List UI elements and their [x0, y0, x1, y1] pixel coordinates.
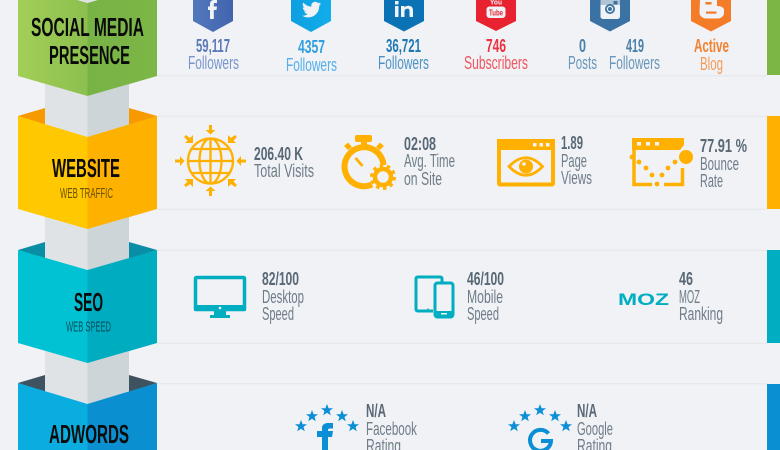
- icon: facebook rating stars: [295, 404, 359, 450]
- stat: youtube subscribers: 746: [486, 36, 506, 56]
- stat: total visits: [254, 144, 314, 181]
- stat: instagram followers: [609, 36, 660, 73]
- stat: total visits: Total Visits: [254, 161, 314, 181]
- stat: average time on site: [404, 134, 455, 189]
- stat: instagram posts: [568, 36, 597, 73]
- icon: blogger shield: [691, 0, 731, 32]
- icon: twitter shield: [291, 0, 331, 32]
- heading: seo: SEO: [74, 287, 103, 317]
- stat: bounce rate: 77.91 %: [700, 136, 747, 156]
- stat: page views: Views: [561, 168, 592, 188]
- central pillar: [45, 0, 129, 450]
- icon: youtube shield: [476, 0, 516, 31]
- stat: desktop speed: Desktop: [262, 287, 304, 307]
- stat: page views: Page: [561, 151, 587, 171]
- right accent bars: [767, 0, 780, 450]
- panel: seo block: [18, 242, 157, 363]
- icon: moz logo: MOZ: [618, 290, 669, 309]
- icon: linkedin shield: [384, 0, 424, 32]
- heading: social media presence: SOCIAL MEDIA: [31, 12, 144, 42]
- icon: bounce rate window: [630, 138, 693, 186]
- icon: page views window with eye: [497, 139, 555, 184]
- stat: moz ranking: 46: [679, 269, 693, 289]
- stat: instagram posts: Posts: [568, 53, 597, 73]
- stat: twitter followers: Followers: [286, 55, 337, 75]
- stat: moz ranking: MOZ: [679, 287, 700, 307]
- stat: moz ranking: Ranking: [679, 304, 723, 324]
- stat: facebook rating: [366, 401, 418, 450]
- stat: facebook followers: 59,117: [196, 36, 230, 56]
- stat: facebook followers: [188, 36, 239, 73]
- panel: adwords block: [18, 375, 157, 450]
- stat: instagram followers: 419: [626, 36, 644, 56]
- stat: active blog: Blog: [700, 54, 723, 74]
- stat: bounce rate: Rate: [700, 171, 723, 191]
- stat: facebook rating: Facebook: [366, 419, 418, 439]
- icon: globe with arrows: [175, 125, 246, 196]
- stat: twitter followers: 4357: [298, 37, 325, 57]
- stat: average time on site: on Site: [404, 169, 442, 189]
- stat: facebook followers: Followers: [188, 53, 239, 73]
- stat: mobile speed: 46/100: [467, 269, 504, 289]
- panel: social media presence block: [18, 0, 157, 96]
- stat: desktop speed: 82/100: [262, 269, 299, 289]
- heading: social media presence: PRESENCE: [49, 40, 130, 70]
- stat: moz ranking: [679, 269, 723, 324]
- icon: google rating stars: [508, 404, 572, 450]
- stat: instagram posts: 0: [579, 36, 586, 56]
- stat: desktop speed: [262, 269, 304, 324]
- stat: page views: [561, 133, 592, 188]
- heading: social media presence: [31, 12, 144, 70]
- stat: bounce rate: Bounce: [700, 154, 739, 174]
- stat: desktop speed: Speed: [262, 304, 294, 324]
- icon: stopwatch with gear: [344, 135, 394, 188]
- stat: twitter followers: [286, 37, 337, 75]
- stat: youtube subscribers: Subscribers: [464, 53, 528, 73]
- icon: tablet and phone: [416, 277, 453, 317]
- stat: google rating: N/A: [577, 401, 597, 421]
- stat: average time on site: 02:08: [404, 134, 436, 154]
- stat: mobile speed: Mobile: [467, 287, 503, 307]
- heading: website: WEBSITE: [52, 153, 120, 183]
- stat: mobile speed: Speed: [467, 304, 499, 324]
- icon: youtube shield: Tube: [489, 8, 503, 18]
- panel: website block: [18, 108, 157, 229]
- stat: average time on site: Avg. Time: [404, 151, 455, 171]
- stat: mobile speed: [467, 269, 504, 324]
- panel outlines: [157, 75, 767, 384]
- stat: instagram followers: Followers: [609, 53, 660, 73]
- icon: desktop monitor: [194, 278, 246, 318]
- subheading: web speed: WEB SPEED: [66, 318, 111, 336]
- stat: linkedin followers: Followers: [378, 53, 429, 73]
- icon: facebook shield: [193, 0, 233, 32]
- stat: bounce rate: [700, 136, 747, 191]
- heading: adwords: ADWORDS: [49, 419, 129, 449]
- stat: active blog: [694, 36, 729, 74]
- stat: youtube subscribers: [464, 36, 528, 73]
- stat: linkedin followers: 36,721: [386, 36, 421, 56]
- stat: page views: 1.89: [561, 133, 583, 153]
- icon: instagram shield: [590, 0, 630, 32]
- stat: linkedin followers: [378, 36, 429, 73]
- subheading: web traffic: WEB TRAFFIC: [60, 185, 113, 202]
- stat: google rating: [577, 401, 613, 450]
- stat: total visits: 206.40 K: [254, 144, 303, 164]
- stat: facebook rating: N/A: [366, 401, 386, 421]
- stat: google rating: Google: [577, 419, 613, 439]
- stat: active blog: Active: [694, 36, 729, 56]
